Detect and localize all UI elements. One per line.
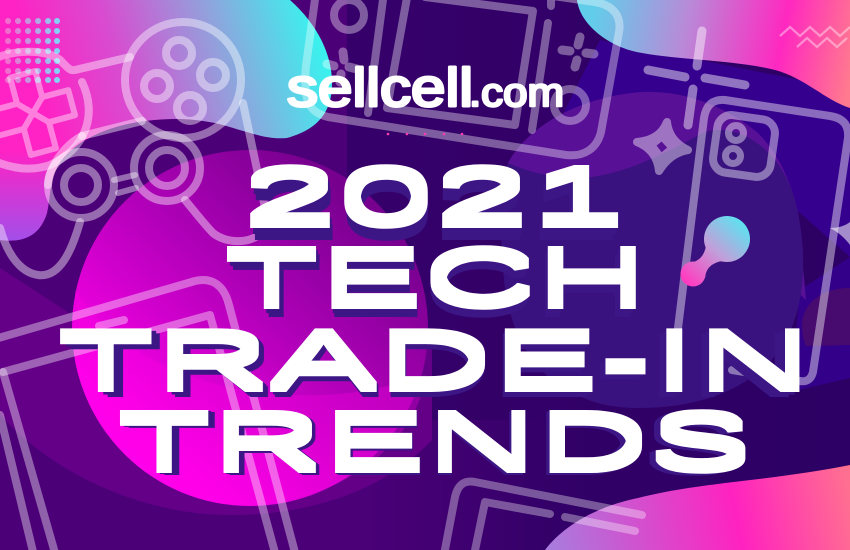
background shape: lower right indigo <box>790 257 850 392</box>
title shadows: 2021 <box>245 160 624 246</box>
title shadows: TECH <box>230 243 642 329</box>
small decorative dots under logo <box>387 133 463 135</box>
icon: crosshair lines <box>648 31 745 125</box>
icon: tablet outline bottom left <box>0 280 297 550</box>
background shape: right indigo wave <box>560 40 850 257</box>
background shape: left mauve band <box>0 268 432 515</box>
top-left gradient blob <box>0 0 332 241</box>
logo: sellcell.com <box>287 58 564 118</box>
background shape: right purple crescent <box>508 92 806 300</box>
icon: sparkle star <box>637 122 688 171</box>
title line: 2021: 2021 <box>242 154 626 240</box>
bottom-right gradient blob <box>545 465 850 550</box>
zigzag lines <box>780 27 850 47</box>
logo word: sellcell <box>287 58 473 118</box>
icon: handheld console outline <box>305 0 620 155</box>
title shadows <box>63 160 807 487</box>
title shadows: TRENDS <box>121 400 747 486</box>
title shadows: 2021 <box>247 166 621 252</box>
background shape: lower-right dark circle <box>802 288 850 346</box>
top-right gradient blob <box>577 0 850 108</box>
logo suffix: .com <box>469 71 564 115</box>
background shape: lower centre blend <box>347 420 560 550</box>
dot grid <box>5 18 60 83</box>
title line: TECH: TECH <box>224 235 648 321</box>
icon: game controller outline <box>0 22 267 275</box>
title <box>57 154 812 485</box>
title line: TRADE-IN: TRADE-IN <box>57 316 812 404</box>
icon: right-edge sparkle <box>830 222 850 245</box>
title shadows: TRADE-IN <box>68 321 801 409</box>
logo mark: dumbbell droplet <box>680 216 750 286</box>
magenta circle <box>72 150 428 506</box>
background shape: right purple disc <box>501 130 803 408</box>
title line: TRENDS: TRENDS <box>117 399 752 485</box>
top-left blob lower tint <box>0 150 60 241</box>
curved highlight band over the circle <box>75 290 425 504</box>
icon: tablet outline bottom centre <box>443 482 642 550</box>
title shadows: TECH <box>227 239 645 325</box>
icon: smartphone outline <box>678 100 848 381</box>
title shadows: TRADE-IN <box>63 318 807 406</box>
title shadows: TRENDS <box>126 401 743 487</box>
